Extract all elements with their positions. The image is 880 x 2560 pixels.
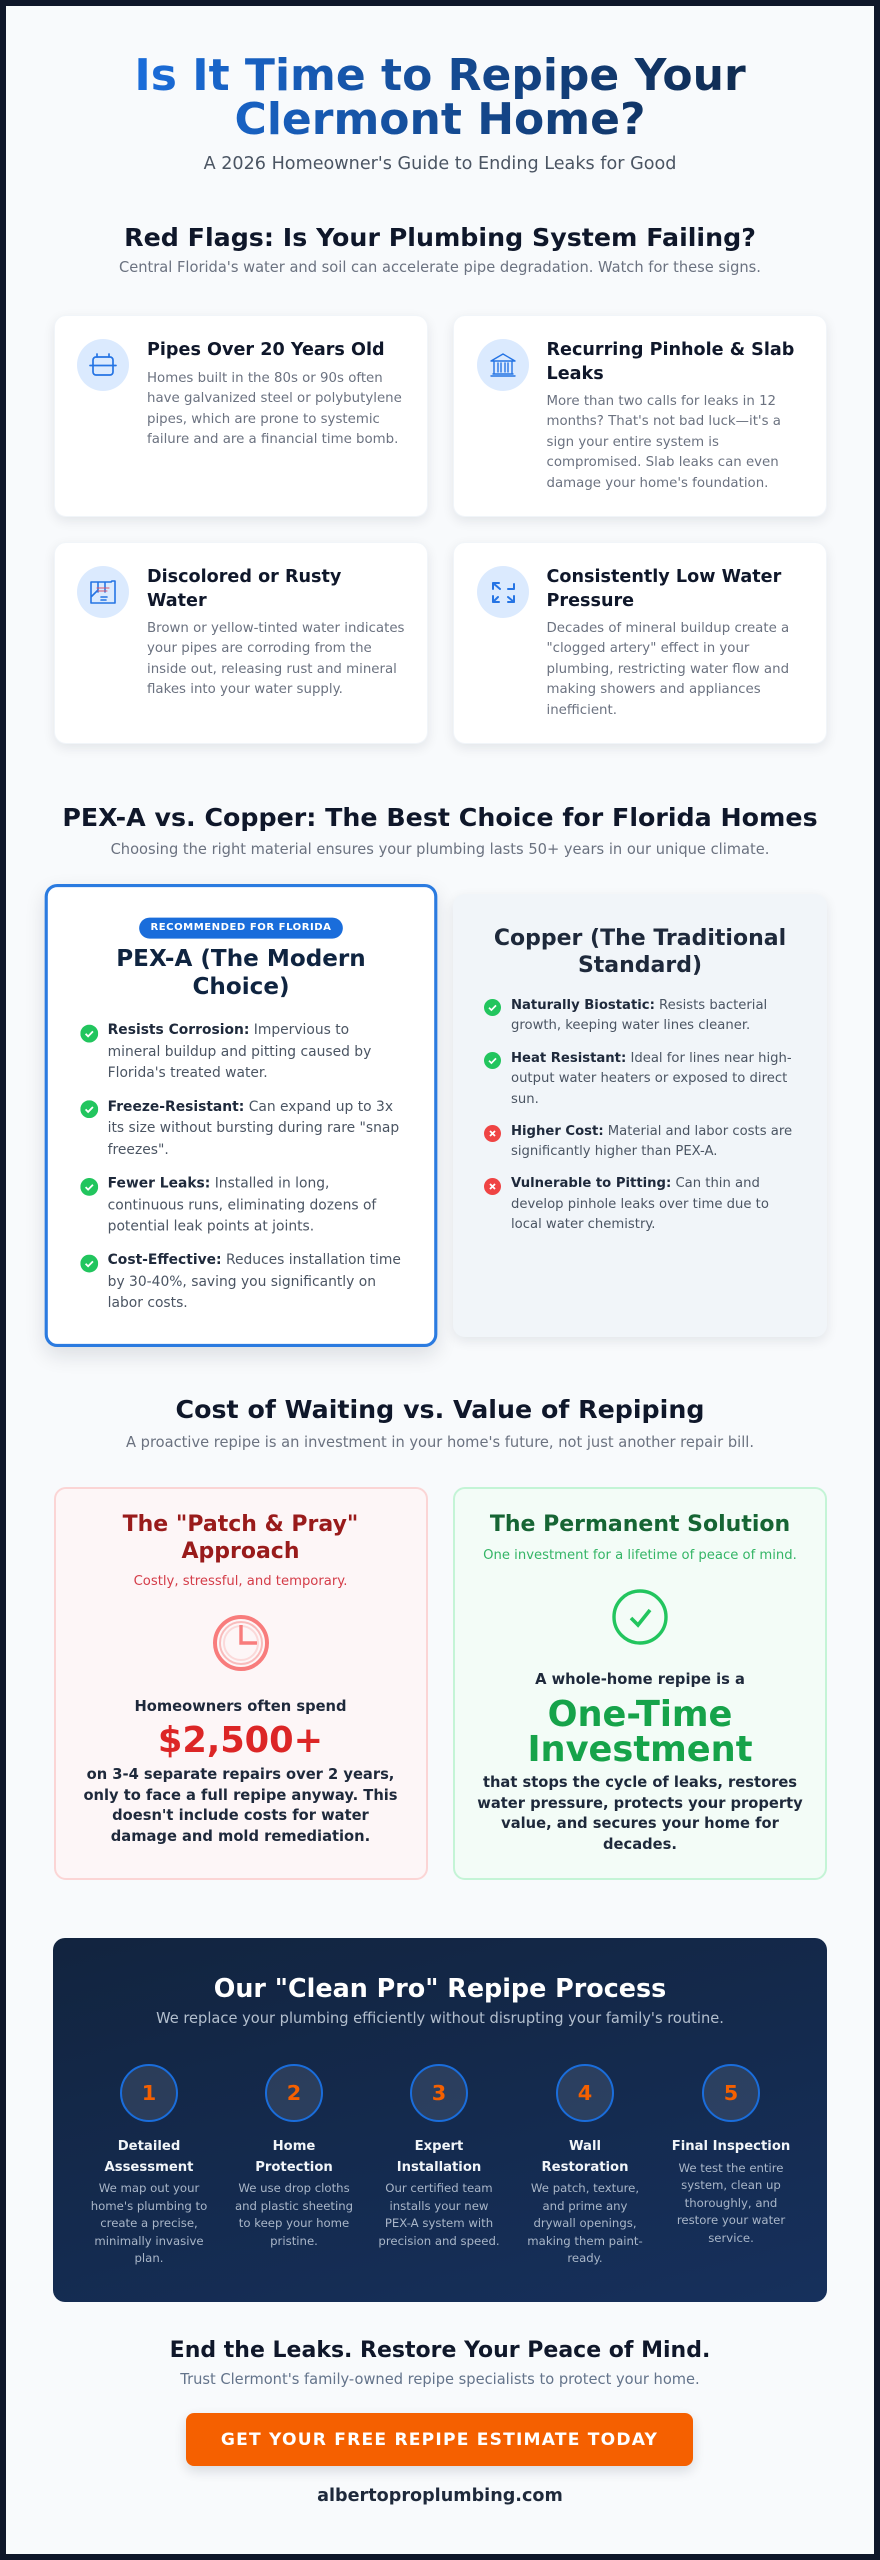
step text: We map out your xyxy=(99,2181,199,2195)
list item: sun. xyxy=(511,1092,539,1106)
card text: Decades of mineral buildup create a xyxy=(546,620,789,636)
step text: ready. xyxy=(567,2251,603,2265)
explanation: only to face a full repipe anyway. This xyxy=(83,1786,398,1804)
step title xyxy=(255,2139,333,2174)
icon: check circle xyxy=(612,1589,668,1645)
card text: "clogged artery" effect in your xyxy=(546,641,749,656)
process subheading: We replace your plumbing efficiently without disrupting your family's routine. xyxy=(156,2010,724,2027)
step title: Home xyxy=(273,2139,315,2154)
explanation: damage and mold remediation. xyxy=(111,1828,370,1844)
list item xyxy=(80,1253,400,1311)
icon: pressure arrows xyxy=(476,566,528,618)
list item xyxy=(484,1176,769,1232)
red heading: Approach xyxy=(181,1539,300,1564)
stat: one-time investment: Investment xyxy=(527,1729,753,1770)
step number xyxy=(120,2064,178,2122)
step number xyxy=(410,2064,468,2122)
list item: potential leak points at joints. xyxy=(107,1219,314,1235)
explanation: that stops the cycle of leaks, restores xyxy=(483,1774,797,1791)
panel: discolored water xyxy=(54,542,428,744)
list item: labor costs. xyxy=(107,1296,187,1311)
step text: system, clean up xyxy=(681,2178,781,2192)
copper title xyxy=(494,926,786,978)
list item: Vulnerable to Pitting: Can thin and xyxy=(511,1176,760,1191)
panel: process xyxy=(53,1938,827,2302)
step text: plan. xyxy=(135,2251,163,2265)
card text xyxy=(546,620,789,718)
step text: making them paint- xyxy=(527,2234,643,2248)
panel: pipes over 20 years old xyxy=(54,315,428,517)
step text: and prime any xyxy=(543,2199,627,2213)
step title xyxy=(397,2139,481,2174)
icon: pipe calendar xyxy=(77,339,129,391)
title: Clermont Home? xyxy=(235,94,645,144)
icon: clock xyxy=(213,1615,269,1671)
step text: and plastic sheeting xyxy=(235,2199,353,2213)
step text: to keep your home xyxy=(239,2216,349,2230)
panel: PEX-A xyxy=(44,884,437,1347)
card text xyxy=(147,370,402,447)
list item: develop pinhole leaks over time due to xyxy=(511,1196,769,1212)
list item xyxy=(80,1023,371,1081)
card text: damage your home's foundation. xyxy=(546,476,768,490)
green heading: The Permanent Solution xyxy=(490,1512,790,1537)
step number: 3 xyxy=(432,2081,446,2105)
step title: Installation xyxy=(397,2160,481,2174)
step title: Assessment xyxy=(105,2160,193,2174)
subheading: pex vs copper: Choosing the right material ensures your plumbing lasts 50+ years in our unique climate. xyxy=(111,841,769,858)
list item: Fewer Leaks: Installed in long, xyxy=(107,1176,329,1192)
list item: Florida's treated water. xyxy=(107,1066,267,1081)
card text xyxy=(147,620,404,697)
stat: one-time investment: One-Time xyxy=(548,1694,732,1735)
card text: plumbing, restricting water flow and xyxy=(546,662,789,676)
green subheading: One investment for a lifetime of peace of mind. xyxy=(483,1548,797,1563)
explanation: value, and secures your home for xyxy=(501,1815,779,1832)
list item xyxy=(484,998,767,1033)
list item: output water heaters or exposed to direct xyxy=(511,1071,787,1086)
list item: by 30-40%, saving you significantly on xyxy=(107,1274,375,1290)
heading: red flags: Red Flags: Is Your Plumbing System Failing? xyxy=(124,223,756,252)
explanation: water pressure, protects your property xyxy=(477,1794,803,1812)
step title: Wall xyxy=(569,2139,601,2154)
card text: months? That's not bad luck—it's a xyxy=(546,414,781,429)
step title: Restoration xyxy=(542,2160,628,2174)
step text xyxy=(91,2181,207,2265)
step text: service. xyxy=(708,2231,754,2245)
step text xyxy=(235,2181,353,2248)
copper title: Copper (The Traditional xyxy=(494,926,786,951)
list item: significantly higher than PEX-A. xyxy=(511,1144,718,1159)
panel: patch and pray xyxy=(54,1487,428,1880)
step text xyxy=(527,2181,643,2265)
step number xyxy=(265,2064,323,2122)
card text: Homes built in the 80s or 90s often xyxy=(147,370,383,386)
card text xyxy=(546,394,781,490)
list item: growth, keeping water lines cleaner. xyxy=(511,1018,750,1033)
copper title: Standard) xyxy=(578,953,702,978)
step title: Protection xyxy=(255,2160,333,2174)
list item: its size without bursting during rare "snap xyxy=(107,1121,399,1136)
card text: your pipes are corroding from the xyxy=(147,641,372,656)
explanation: decades. xyxy=(603,1836,677,1852)
card text: sign your entire system is xyxy=(546,434,719,450)
step number: 2 xyxy=(287,2081,301,2105)
badge xyxy=(139,918,342,939)
step 3 xyxy=(378,2064,500,2248)
step text: Our certified team xyxy=(385,2181,493,2195)
card text: compromised. Slab leaks can even xyxy=(546,455,779,470)
step number xyxy=(702,2064,760,2122)
step text: installs your new xyxy=(390,2199,488,2213)
step text: PEX-A system with xyxy=(385,2216,493,2230)
list item xyxy=(484,1050,792,1106)
step 1 xyxy=(91,2064,207,2265)
step 2 xyxy=(235,2064,353,2248)
list item: mineral buildup and pitting caused by xyxy=(107,1044,371,1060)
CTA heading: End the Leaks. Restore Your Peace of Mind. xyxy=(170,2338,710,2363)
step 4 xyxy=(527,2064,643,2265)
list item xyxy=(80,1099,399,1158)
card title: Consistently Low Water xyxy=(546,567,781,587)
title xyxy=(0,54,880,142)
lead text: A whole-home repipe is a xyxy=(535,1671,745,1688)
step text: We test the entire xyxy=(678,2160,784,2174)
stat: cost: $2,500+ xyxy=(158,1720,323,1761)
subheading: cost of waiting: A proactive repipe is an investment in your home's future, not just another repair bill. xyxy=(126,1434,754,1450)
card title: Water xyxy=(147,590,207,610)
step title: Expert xyxy=(415,2139,463,2154)
card text: failure and are a financial time bomb. xyxy=(147,432,398,447)
panel: recurring leaks xyxy=(453,315,827,517)
card title: Discolored or Rusty xyxy=(147,567,341,587)
step text: pristine. xyxy=(270,2234,318,2248)
step number: 1 xyxy=(142,2081,156,2105)
step title xyxy=(104,2139,194,2174)
panel: permanent solution xyxy=(453,1487,827,1880)
step text: We use drop cloths xyxy=(238,2181,350,2195)
card title: Pipes Over 20 Years Old xyxy=(147,340,385,360)
CTA button xyxy=(186,2413,693,2466)
list item: Freeze-Resistant: Can expand up to 3x xyxy=(107,1099,393,1115)
card text: Brown or yellow-tinted water indicates xyxy=(147,620,404,636)
list item: Naturally Biostatic: Resists bacterial xyxy=(511,998,767,1012)
PEX title xyxy=(116,946,365,1001)
step text: thoroughly, and xyxy=(685,2196,777,2210)
panel: low pressure xyxy=(453,542,827,744)
explanation xyxy=(83,1766,398,1844)
process heading: Our "Clean Pro" Repipe Process xyxy=(214,1972,666,2002)
list item: Higher Cost: Material and labor costs are xyxy=(511,1124,792,1138)
card title: Pressure xyxy=(546,590,634,610)
list item: Cost-Effective: Reduces installation time xyxy=(107,1253,400,1268)
step title xyxy=(542,2139,628,2174)
explanation xyxy=(477,1774,803,1852)
card title: Leaks xyxy=(546,364,604,384)
step title: Final Inspection xyxy=(672,2139,790,2154)
CTA subheading: Trust Clermont's family-owned repipe specialists to protect your home. xyxy=(180,2371,700,2388)
heading: pex vs copper: PEX-A vs. Copper: The Best Choice for Florida Homes xyxy=(62,803,818,832)
card text: More than two calls for leaks in 12 xyxy=(546,394,776,408)
list item xyxy=(80,1176,376,1235)
card title: Recurring Pinhole & Slab xyxy=(546,340,794,360)
stat: one-time investment xyxy=(527,1694,753,1770)
explanation: on 3-4 separate repairs over 2 years, xyxy=(87,1766,394,1783)
step text xyxy=(378,2181,500,2248)
explanation: doesn't include costs for water xyxy=(112,1807,369,1824)
red heading: The "Patch & Pray" xyxy=(123,1512,358,1537)
list item xyxy=(484,1124,792,1159)
step text: create a precise, xyxy=(100,2216,198,2230)
card text: flakes into your water supply. xyxy=(147,682,343,697)
card text: inside out, releasing rust and mineral xyxy=(147,662,397,676)
step text: drywall openings, xyxy=(533,2216,637,2230)
step number xyxy=(556,2064,614,2122)
card text: making showers and appliances xyxy=(546,682,761,697)
card title xyxy=(546,567,782,610)
step number: 4 xyxy=(578,2081,592,2105)
card text: have galvanized steel or polybutylene xyxy=(147,391,402,406)
website: albertoproplumbing.com xyxy=(317,2486,563,2506)
red subheading: Costly, stressful, and temporary. xyxy=(134,1574,347,1589)
list item: local water chemistry. xyxy=(511,1217,656,1232)
card title xyxy=(147,567,341,610)
step text: precision and speed. xyxy=(378,2234,500,2248)
step 5 xyxy=(672,2064,790,2245)
step text: restore your water xyxy=(677,2213,785,2227)
list item: Resists Corrosion: Impervious to xyxy=(107,1023,349,1038)
step number: 5 xyxy=(724,2081,738,2105)
badge: RECOMMENDED FOR FLORIDA xyxy=(150,922,331,933)
CTA button: GET YOUR FREE REPIPE ESTIMATE TODAY xyxy=(221,2430,658,2450)
card title xyxy=(546,340,794,384)
title: Is It Time to Repipe Your xyxy=(134,50,746,100)
icon: building xyxy=(476,339,528,391)
panel: Copper xyxy=(453,894,827,1337)
card text: inefficient. xyxy=(546,702,617,718)
PEX title: PEX-A (The Modern xyxy=(116,946,365,972)
list item: Heat Resistant: Ideal for lines near high- xyxy=(511,1050,792,1066)
PEX title: Choice) xyxy=(192,974,289,1001)
step text xyxy=(677,2160,786,2245)
red heading xyxy=(122,1512,358,1564)
lead text: Homeowners often spend xyxy=(134,1698,347,1715)
icon: rusty water xyxy=(77,566,129,618)
list item: freezes". xyxy=(107,1142,168,1158)
step text: home's plumbing to xyxy=(91,2199,207,2213)
heading: cost of waiting: Cost of Waiting vs. Value of Repiping xyxy=(176,1395,704,1424)
card text: pipes, which are prone to systemic xyxy=(147,412,380,426)
step title: Detailed xyxy=(118,2139,180,2154)
list item: continuous runs, eliminating dozens of xyxy=(107,1197,376,1213)
step text: minimally invasive xyxy=(94,2234,204,2248)
subtitle: A 2026 Homeowner's Guide to Ending Leaks for Good xyxy=(204,154,676,174)
step text: We patch, texture, xyxy=(531,2181,639,2195)
subheading: red flags: Central Florida's water and soil can accelerate pipe degradation. Watch for these signs. xyxy=(119,259,761,276)
